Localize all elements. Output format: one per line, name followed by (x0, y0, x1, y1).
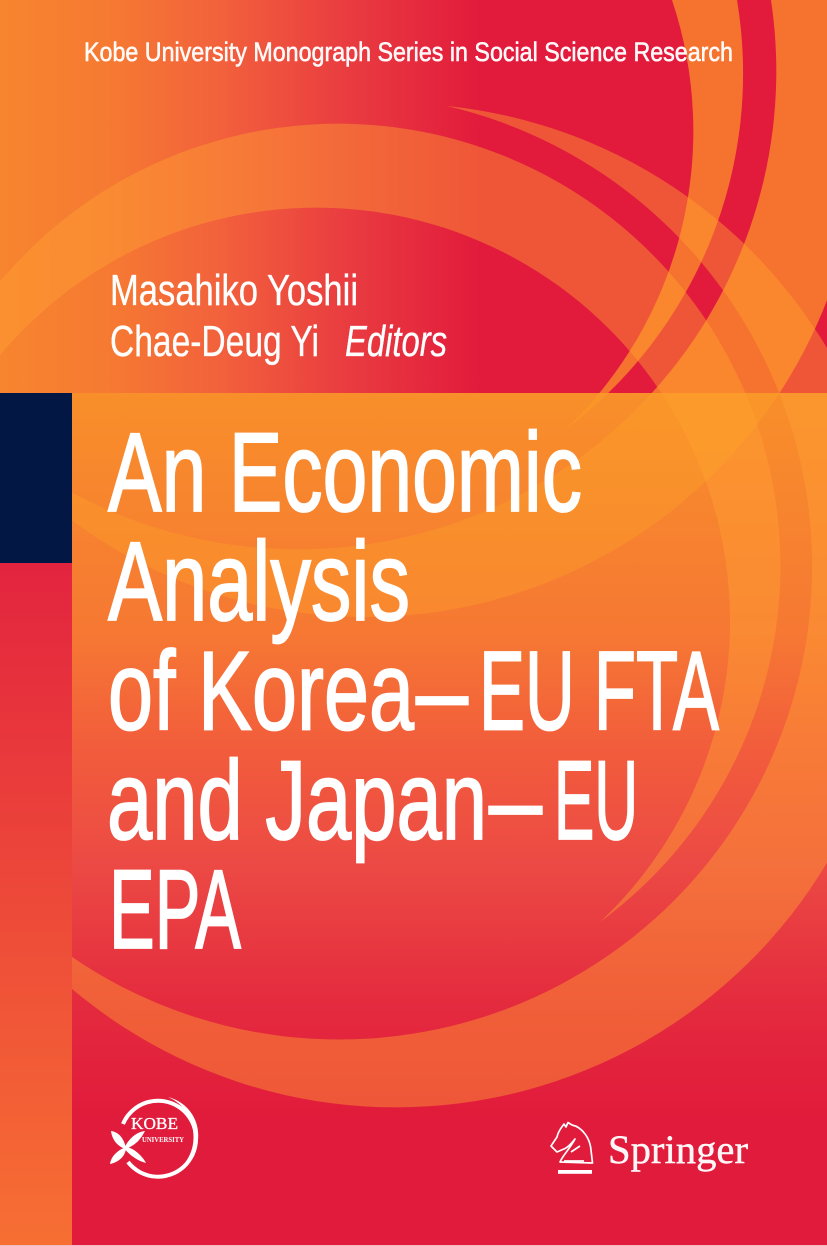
logo: Kobe University (110, 1097, 198, 1177)
book title (107, 410, 719, 972)
book title: EPA (109, 847, 241, 972)
background: upper panel (0, 0, 827, 393)
navy block (0, 393, 72, 563)
editors: Editors (345, 317, 447, 366)
logo: Springer knight (551, 1122, 592, 1174)
book title: and Japan (107, 738, 487, 863)
book title: Analysis (108, 519, 410, 644)
logo: Kobe University: UNIVERSITY (142, 1136, 185, 1144)
editors: Masahiko Yoshii (110, 266, 358, 315)
left strip (0, 563, 72, 1246)
editors: Chae-Deug Yi (110, 317, 319, 366)
arc: top right crescent (0, 0, 827, 617)
arc: large crescent with tail (0, 124, 780, 922)
series title: Kobe University Monograph Series in Social Science Research (84, 37, 733, 67)
logo: Kobe University: KOBE (131, 1114, 178, 1133)
book title: EU (554, 738, 638, 863)
background: lower panel (0, 393, 827, 1246)
arc: vertical tapered band (565, 0, 743, 430)
logo: Springer wordmark: Springer (608, 1127, 748, 1172)
book title: – (489, 738, 543, 863)
editors (110, 266, 447, 366)
bottom edge (0, 1245, 827, 1246)
book title: An Economic (108, 410, 582, 535)
book title: – (416, 628, 469, 754)
book title: of Korea (108, 628, 415, 754)
